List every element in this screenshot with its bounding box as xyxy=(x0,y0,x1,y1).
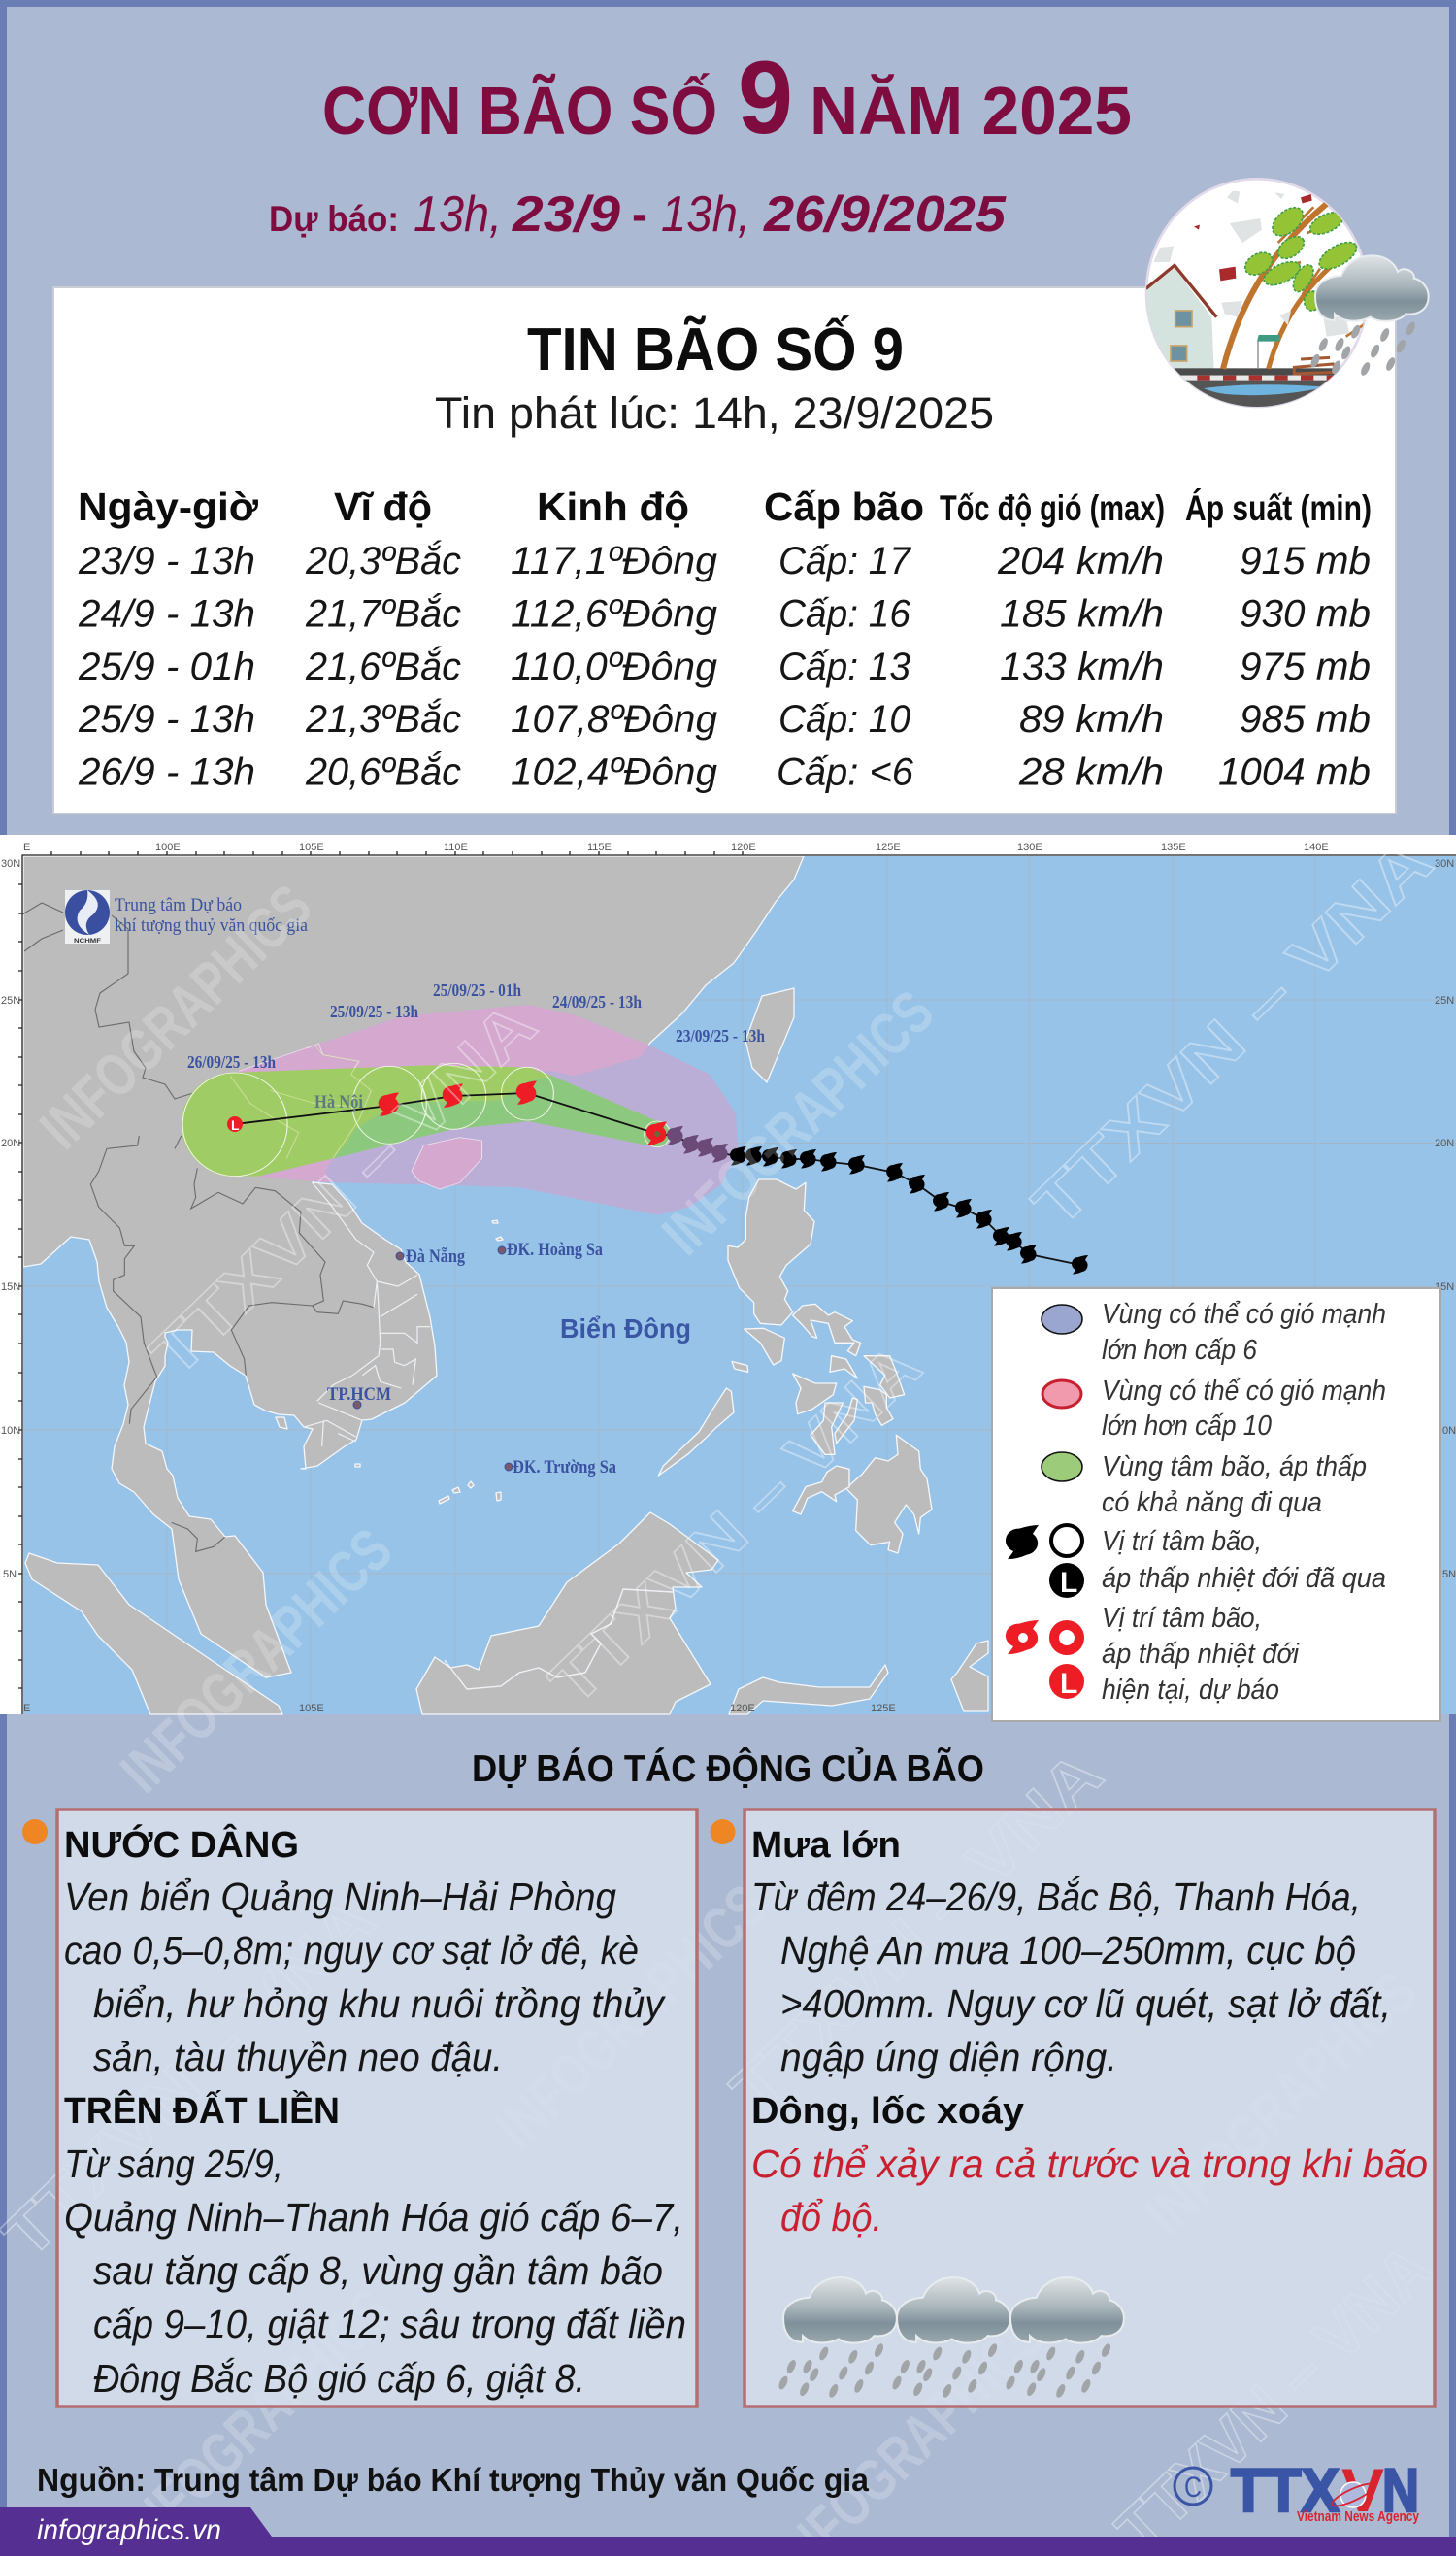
watermarks: TTXVN – VNA xyxy=(136,988,549,1390)
heading: heavy rain: Mưa lớn xyxy=(751,1825,901,1866)
axis labels xyxy=(1,842,1456,1714)
mainland Asia xyxy=(23,856,804,1677)
legend: storm centre path: Vùng tâm bão, áp thấp xyxy=(1102,1451,1367,1482)
place labels: ĐK. Trường Sa xyxy=(513,1457,616,1477)
text: on land xyxy=(64,2141,686,2401)
text: heavy rain: Nghệ An mưa 100–250mm, cục bộ xyxy=(780,1928,1356,1973)
text: on land: Đông Bắc Bộ gió cấp 6, giật 8. xyxy=(93,2356,585,2401)
table rows: Cấp: 17 xyxy=(778,540,912,582)
text: storm surge xyxy=(64,1875,666,2079)
legend: wind above level 6: lớn hơn cấp 6 xyxy=(1102,1335,1258,1366)
zone: wind above level 10 on land xyxy=(238,1005,649,1189)
legend: current and forecast positions: hiện tại, dự báo xyxy=(1102,1675,1279,1706)
icon: storm illustration xyxy=(1145,179,1429,411)
table rows: 117,1ºĐông xyxy=(511,540,717,582)
watermarks: INFOGRAPHICS xyxy=(28,873,324,1162)
axis labels: 20N xyxy=(1,1138,20,1149)
map frame xyxy=(18,851,1456,1714)
logo: TTXVN xyxy=(1175,2457,1420,2525)
date labels: 25/09/25 - 13h xyxy=(330,1002,418,1021)
table rows: 21,3ºBắc xyxy=(305,697,461,741)
axis labels: E xyxy=(23,1703,30,1714)
bulletin issue time: Tin phát lúc: 14h, 23/9/2025 xyxy=(435,388,994,438)
text: storm surge: Ven biển Quảng Ninh–Hải Phòng xyxy=(64,1875,616,1919)
table rows: 28 km/h xyxy=(1018,751,1164,794)
text: heavy rain xyxy=(751,1875,1391,2079)
axis labels: 15N xyxy=(1,1281,20,1293)
axis labels: 105E xyxy=(299,1703,324,1714)
table rows: 985 mb xyxy=(1240,698,1371,741)
Sulawesi xyxy=(729,1641,988,1714)
table rows: 204 km/h xyxy=(997,540,1164,582)
Taiwan xyxy=(745,988,794,1082)
text: heavy rain: ngập úng diện rộng. xyxy=(780,2035,1117,2079)
axis labels: 140E xyxy=(1304,842,1329,853)
place labels xyxy=(314,1092,691,1477)
table header: Ngày-giờ xyxy=(78,484,259,529)
map: storm track on East Sea xyxy=(0,835,1456,1714)
heading: thunderstorms: Dông, lốc xoáy xyxy=(751,2091,1024,2132)
date labels xyxy=(187,980,765,1072)
axis labels: 125E xyxy=(871,1703,896,1714)
table header: Cấp bão xyxy=(764,484,924,529)
table rows: 21,6ºBắc xyxy=(305,645,461,688)
source line: Nguồn: Trung tâm Dự báo Khí tượng Thủy văn Quốc gia xyxy=(37,2462,870,2498)
legend: wind above level 10: lớn hơn cấp 10 xyxy=(1102,1411,1272,1442)
zone: storm centre path xyxy=(182,1065,670,1177)
panel: storm surge and inland wind xyxy=(22,1809,697,2407)
table rows: 20,3ºBắc xyxy=(305,539,461,582)
bullet xyxy=(711,1819,736,1844)
legend: current and forecast positions: áp thấp nhiệt đới xyxy=(1102,1639,1300,1670)
axis labels: 5N xyxy=(1442,1569,1456,1580)
past positions xyxy=(730,1146,1088,1274)
legend: current and forecast positions: L xyxy=(1060,1668,1077,1700)
table rows xyxy=(78,539,1371,794)
icon: rain clouds xyxy=(778,2277,1124,2399)
Sumatra xyxy=(25,1553,282,1714)
place labels: Biển Đông xyxy=(560,1313,691,1344)
title: NĂM 2025 xyxy=(810,73,1132,149)
watermarks: INFOGRAPHICS xyxy=(109,1516,405,1806)
logo: TTXVN: V xyxy=(1341,2457,1384,2525)
footer bar: infographics.vn xyxy=(37,2514,221,2546)
text: heavy rain: Từ đêm 24–26/9, Bắc Bộ, Thanh Hóa, xyxy=(751,1875,1361,1919)
axis labels: 120E xyxy=(731,842,756,853)
text: storm surge: cao 0,5–0,8m; nguy cơ sạt lở đê, kè xyxy=(64,1928,639,1973)
axis labels: 120E xyxy=(730,1703,755,1714)
title xyxy=(322,39,1132,155)
axis labels: 30N xyxy=(1435,858,1454,870)
legend: past positions xyxy=(1006,1525,1386,1599)
table rows: Cấp: 16 xyxy=(778,592,911,635)
legend: wind above level 6 xyxy=(1042,1299,1386,1366)
wind zones xyxy=(182,1005,738,1215)
logo: TTXVN: TTX xyxy=(1231,2457,1340,2525)
bullet xyxy=(22,1819,48,1844)
text: on land: Từ sáng 25/9, xyxy=(64,2141,283,2186)
legend: past positions: Vị trí tâm bão, xyxy=(1102,1526,1262,1557)
heading: storm surge: NƯỚC DÂNG xyxy=(64,1823,299,1866)
forecast centre logo and name: Trung tâm Dự báo xyxy=(115,895,242,915)
table rows: 102,4ºĐông xyxy=(511,751,717,794)
table rows: 112,6ºĐông xyxy=(511,592,717,635)
forecast period subtitle: Dự báo: xyxy=(269,199,399,239)
text: storm surge: biển, hư hỏng khu nuôi trồng thủy xyxy=(93,1981,666,2026)
forecast period subtitle: 26/9/2025 xyxy=(763,186,1007,243)
legend: storm centre path xyxy=(1042,1451,1367,1518)
land masses xyxy=(23,856,988,1714)
panel: map legend xyxy=(992,1288,1440,1721)
table header: Tốc độ gió (max) xyxy=(940,488,1165,528)
axis labels: 115E xyxy=(587,842,612,853)
low-pressure marker xyxy=(227,1116,243,1133)
country borders xyxy=(22,903,374,1551)
Philippines xyxy=(658,1179,932,1553)
table rows: 1004 mb xyxy=(1218,751,1371,794)
axis labels: 0N xyxy=(1442,1425,1456,1437)
forecast period subtitle: 13h, xyxy=(414,186,502,243)
text: on land: sau tăng cấp 8, vùng gần tâm bão xyxy=(93,2248,663,2293)
legend: past positions: L xyxy=(1060,1567,1077,1599)
table rows: 110,0ºĐông xyxy=(511,646,717,688)
place labels: ĐK. Hoàng Sa xyxy=(507,1240,603,1260)
table header: Vĩ độ xyxy=(334,484,432,529)
legend: current and forecast positions: Vị trí tâm bão, xyxy=(1102,1603,1262,1634)
table rows: 975 mb xyxy=(1240,646,1371,688)
table rows: 24/9 - 13h xyxy=(78,592,255,635)
text: on land: Quảng Ninh–Thanh Hóa gió cấp 6–7, xyxy=(64,2195,683,2240)
watermarks: INFOGRAPHICS xyxy=(650,979,946,1268)
axis labels: 110E xyxy=(444,842,468,853)
forecast centre logo and name: NCHMF xyxy=(74,939,101,945)
legend: current and forecast positions xyxy=(1006,1603,1300,1706)
axis labels: 15N xyxy=(1435,1281,1454,1293)
table rows: 21,7ºBắc xyxy=(305,592,461,635)
table rows: Cấp: 10 xyxy=(778,698,910,741)
date labels: 26/09/25 - 13h xyxy=(187,1052,276,1072)
grid lines xyxy=(23,856,1456,1714)
watermarks: INFOGRAPHICS xyxy=(109,2276,405,2556)
watermarks: TTXVN – VNA xyxy=(1102,2231,1445,2556)
Vietnam province lines xyxy=(304,1182,430,1446)
table rows: 915 mb xyxy=(1240,540,1371,582)
watermarks: TTXVN – VNA xyxy=(535,1330,934,1718)
axis labels: 135E xyxy=(1161,842,1186,853)
axis labels: 20N xyxy=(1435,1138,1454,1149)
panel: heavy rain and tornado xyxy=(711,1809,1435,2407)
zone: wind above level 6 xyxy=(238,1005,738,1215)
watermarks: INFOGRAPHICS xyxy=(483,1873,779,2162)
panel: storm bulletin table xyxy=(53,287,1396,813)
legend: wind above level 10 xyxy=(1042,1376,1386,1442)
legend: past positions: áp thấp nhiệt đới đã qua xyxy=(1102,1563,1386,1594)
legend: wind above level 10: Vùng có thể có gió mạnh xyxy=(1102,1376,1386,1407)
date labels: 24/09/25 - 13h xyxy=(552,992,642,1012)
table rows: 107,8ºĐông xyxy=(511,698,717,741)
forecast centre logo and name xyxy=(65,890,309,945)
forecast positions xyxy=(379,1081,667,1145)
table rows: Cấp: <6 xyxy=(777,751,914,794)
watermarks: TTXVN – VNA xyxy=(716,1738,1115,2126)
table header: Áp suất (min) xyxy=(1185,488,1372,528)
watermarks: TTXVN – VNA xyxy=(1018,825,1445,1241)
text: storm surge: sản, tàu thuyền neo đậu. xyxy=(93,2035,503,2079)
table rows: 930 mb xyxy=(1240,592,1371,635)
legend: wind above level 6: Vùng có thể có gió mạnh xyxy=(1102,1299,1386,1330)
table rows: Cấp: 13 xyxy=(778,646,910,688)
forecast period subtitle xyxy=(269,186,1007,243)
track line xyxy=(235,1093,1080,1265)
forecast period subtitle: - xyxy=(632,186,647,243)
table rows: 23/9 - 13h xyxy=(78,540,255,582)
text: thunderstorm warning xyxy=(751,2141,1428,2240)
axis labels: 25N xyxy=(1,995,20,1007)
legend: storm centre path: có khả năng đi qua xyxy=(1102,1487,1322,1518)
text: on land: cấp 9–10, giật 12; sâu trong đất liền xyxy=(93,2302,686,2346)
axis labels: 105E xyxy=(299,842,324,853)
table rows: 89 km/h xyxy=(1019,698,1164,741)
axis labels: 130E xyxy=(1017,842,1042,853)
axis labels: E xyxy=(23,842,30,853)
table header: Kinh độ xyxy=(537,484,689,529)
Borneo xyxy=(416,1512,718,1714)
logo: TTXVN: Vietnam News Agency xyxy=(1297,2508,1420,2525)
place labels: TP.HCM xyxy=(327,1384,391,1405)
logo: TTXVN: C xyxy=(1184,2472,1202,2504)
date labels: 23/09/25 - 13h xyxy=(676,1026,765,1046)
bulletin heading: TIN BÃO SỐ 9 xyxy=(527,316,904,383)
text: heavy rain: >400mm. Nguy cơ lũ quét, sạt lở đất, xyxy=(780,1981,1391,2026)
text: thunderstorm warning: Có thể xảy ra cả trước và trong khi bão xyxy=(751,2141,1428,2186)
table rows: 20,6ºBắc xyxy=(305,749,461,794)
forecast centre logo and name: khí tượng thuỷ văn quốc gia xyxy=(115,915,309,936)
axis labels: 100E xyxy=(155,842,181,853)
table rows: 25/9 - 13h xyxy=(78,698,255,741)
heading: on land: TRÊN ĐẤT LIỀN xyxy=(64,2089,340,2132)
text: thunderstorm warning: đổ bộ. xyxy=(780,2195,882,2240)
axis labels: 125E xyxy=(876,842,901,853)
forecast circles xyxy=(182,1063,670,1177)
small islands xyxy=(276,1220,503,1504)
table rows: 26/9 - 13h xyxy=(78,751,255,794)
title: 9 xyxy=(738,39,793,155)
forecast period subtitle: 13h, xyxy=(661,186,750,243)
forecast period subtitle: 23/9 xyxy=(512,186,620,243)
date labels: 25/09/25 - 01h xyxy=(433,980,521,1000)
table rows: 185 km/h xyxy=(1000,592,1164,635)
watermarks xyxy=(0,825,1445,2556)
table rows: 133 km/h xyxy=(1000,646,1164,688)
place labels: Đà Nẵng xyxy=(406,1246,465,1267)
axis labels: 25N xyxy=(1435,995,1454,1007)
table header xyxy=(78,484,1372,529)
axis labels: 5N xyxy=(3,1569,17,1580)
axis labels: 10N xyxy=(1,1425,20,1437)
title: CƠN BÃO SỐ xyxy=(322,72,717,149)
low-pressure marker: L xyxy=(231,1117,240,1133)
section heading: impact forecast: DỰ BÁO TÁC ĐỘNG CỦA BÃO xyxy=(472,1746,984,1790)
footer bar xyxy=(0,2507,1456,2556)
logo: TTXVN: N xyxy=(1382,2457,1419,2525)
axis labels: 30N xyxy=(1,858,20,870)
table rows: 25/9 - 01h xyxy=(78,646,255,688)
place labels: Hà Nội xyxy=(314,1092,363,1112)
